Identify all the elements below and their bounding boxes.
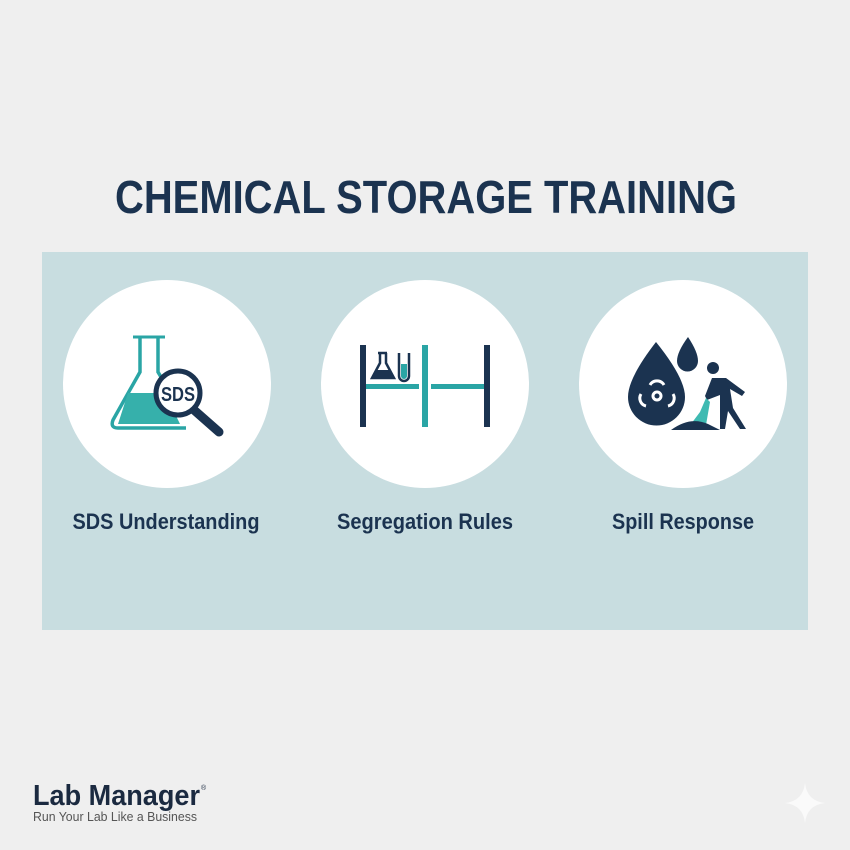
- circle: segregation rules: [321, 280, 529, 488]
- logo: Lab Manager: Run Your Lab Like a Business: [33, 809, 197, 824]
- title: CHEMICAL STORAGE TRAINING: [115, 171, 737, 223]
- label: SDS Understanding: SDS Understanding: [72, 509, 260, 534]
- circle: spill response: [579, 280, 787, 488]
- logo: Lab Manager: Lab Manager: [33, 780, 200, 812]
- icon: sparkle: [785, 783, 825, 823]
- icon: flask with SDS magnifier: SDS: [161, 384, 195, 406]
- label: Segregation Rules: Segregation Rules: [337, 509, 513, 534]
- logo: Lab Manager: ®: [201, 784, 207, 792]
- icon: drops, biohazard, cleaner: [628, 337, 746, 430]
- panel: training topics: [42, 252, 808, 630]
- label: Spill Response: Spill Response: [612, 509, 754, 534]
- circle: SDS understanding: [63, 280, 271, 488]
- icon: flask with SDS magnifier: [112, 337, 219, 432]
- icon: shelves: [360, 345, 490, 427]
